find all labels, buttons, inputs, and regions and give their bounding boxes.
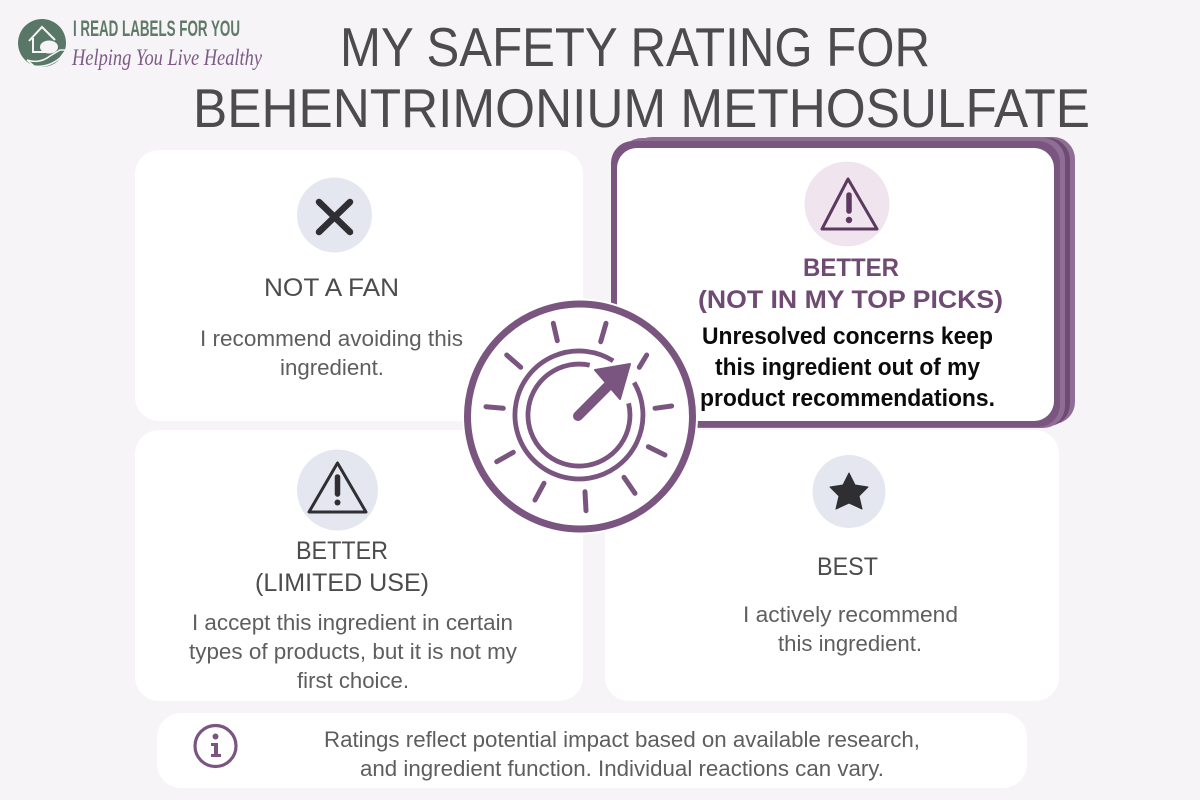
heading: better limited use: (LIMITED USE)	[255, 569, 429, 597]
heading: best: BEST	[817, 553, 878, 581]
description: better limited use: I accept this ingredient in certain	[192, 610, 513, 635]
description: not a fan	[200, 326, 463, 380]
logo name: I READ LABELS FOR YOU	[73, 16, 240, 41]
logo	[18, 16, 263, 70]
description: better limited use: first choice.	[297, 668, 409, 693]
stacked card edges	[611, 137, 1075, 428]
description: best	[743, 602, 958, 656]
icon: warning triangle highlighted	[804, 162, 890, 246]
description: not a fan: I recommend avoiding this	[200, 326, 463, 351]
heading: better not in my top picks	[698, 254, 1003, 314]
description: better limited use	[189, 610, 517, 693]
icon: cross	[297, 178, 372, 252]
heading: better limited use: BETTER	[296, 537, 388, 565]
footer text: and ingredient function. Individual reactions can vary.	[360, 756, 884, 781]
title: BEHENTRIMONIUM METHOSULFATE	[193, 78, 1090, 139]
dial ticks	[486, 323, 672, 511]
panel: better, limited use	[135, 430, 583, 701]
title	[193, 17, 1090, 139]
heading: better not in my top picks: (NOT IN MY TOP PICKS)	[698, 286, 1003, 314]
icon: info	[195, 726, 236, 766]
footer text	[324, 727, 920, 781]
heading: not a fan: NOT A FAN	[264, 274, 399, 302]
panel: not a fan	[135, 150, 583, 421]
footer text: Ratings reflect potential impact based on available research,	[324, 727, 920, 752]
icon: warning triangle	[297, 450, 378, 530]
description: better not in my top picks	[700, 323, 995, 412]
icon: star	[812, 455, 886, 528]
icon: central safety dial	[462, 298, 698, 534]
description: best: this ingredient.	[778, 631, 922, 656]
heading: better not in my top picks: BETTER	[803, 254, 899, 282]
title: MY SAFETY RATING FOR	[340, 17, 930, 78]
description: better not in my top picks: product recommendations.	[700, 385, 995, 412]
description: better not in my top picks: this ingredient out of my	[715, 354, 981, 381]
dial rings	[515, 351, 643, 479]
description: best: I actively recommend	[743, 602, 958, 627]
panel: footer note	[157, 713, 1027, 788]
description: not a fan: ingredient.	[280, 355, 384, 380]
dial arrow	[578, 364, 630, 416]
panel: better, not in my top picks (highlighted)	[611, 137, 1075, 428]
icon: house in hand	[18, 19, 66, 67]
panel: best	[605, 430, 1059, 701]
description: better limited use: types of products, but it is not my	[189, 639, 517, 664]
description: better not in my top picks: Unresolved concerns keep	[702, 323, 993, 350]
heading: better limited use	[255, 537, 429, 597]
logo tagline: Helping You Live Healthy	[71, 45, 263, 70]
